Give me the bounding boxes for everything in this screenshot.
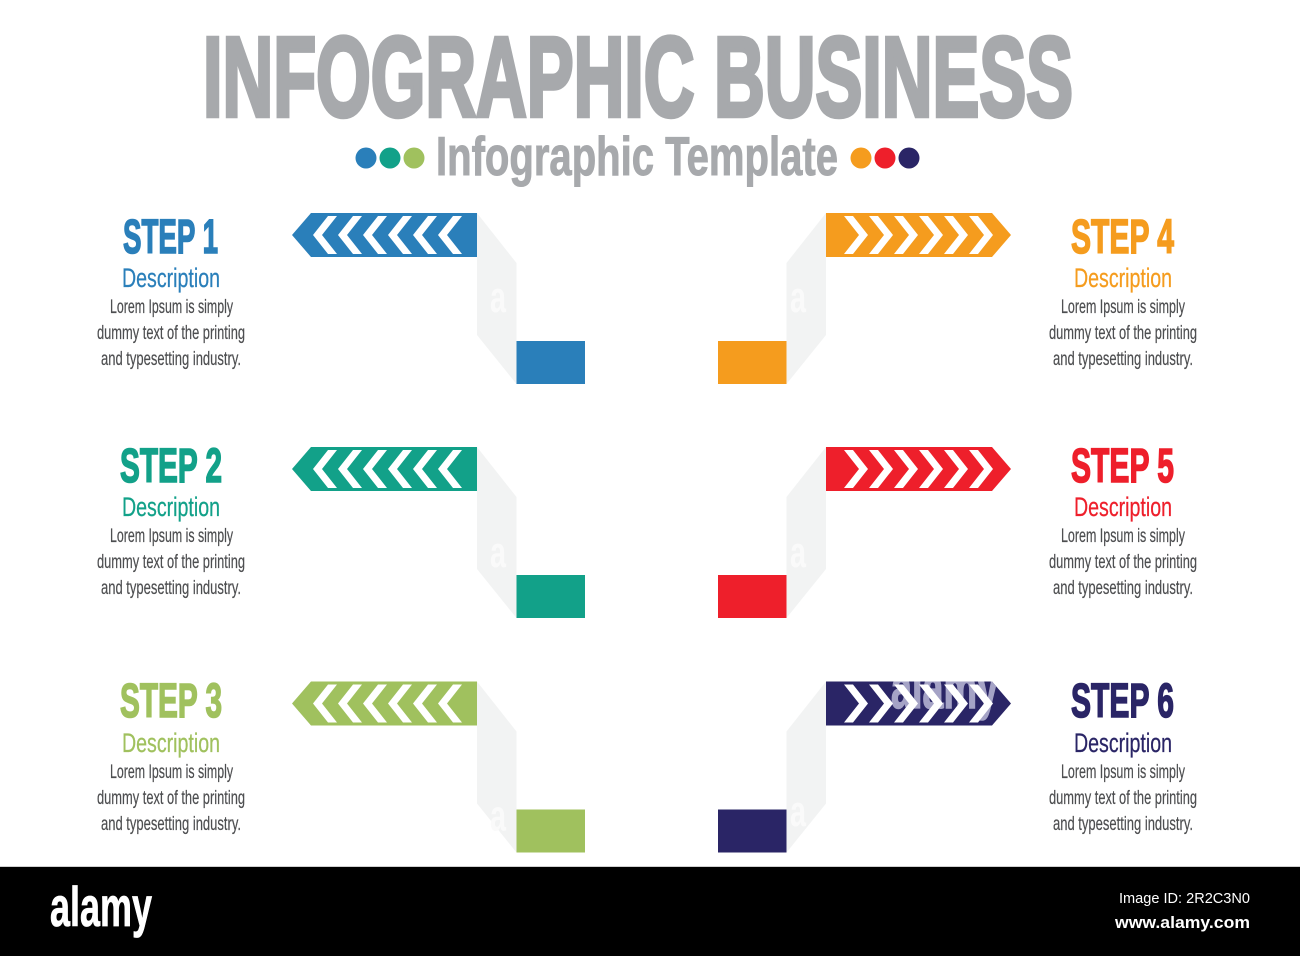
step 3 text block: Lorem Ipsum is simply [110, 761, 233, 783]
step 4 text block [1049, 211, 1197, 370]
step 5 connector graphic: a [790, 528, 806, 577]
step 2 text block: STEP 2 [120, 440, 222, 493]
step 5 text block: STEP 5 [1071, 440, 1174, 493]
step 5 text block: dummy text of the printing [1049, 551, 1197, 573]
step 5 text block: Lorem Ipsum is simply [1061, 525, 1185, 547]
right colour dots [850, 148, 920, 168]
step 6 text block: Lorem Ipsum is simply [1061, 761, 1185, 783]
footer bar: www.alamy.com [1114, 913, 1250, 932]
step 6 text block: Description [1074, 728, 1172, 758]
step 2 text block: Description [122, 492, 220, 522]
footer bar: alamy [50, 875, 152, 938]
step 2 connector graphic [292, 447, 585, 618]
step 4 text block: Lorem Ipsum is simply [1061, 296, 1185, 318]
step 3 text block: STEP 3 [120, 675, 222, 728]
step 4 text block: and typesetting industry. [1053, 348, 1193, 370]
step 4 connector graphic: a [790, 273, 806, 322]
step 3 connector graphic [292, 682, 585, 852]
step 2 text block: and typesetting industry. [101, 577, 241, 599]
step 4 text block: STEP 4 [1071, 211, 1174, 264]
step 1 text block: Lorem Ipsum is simply [110, 296, 233, 318]
step 5 text block: Description [1074, 492, 1172, 522]
step 1 text block: and typesetting industry. [101, 348, 241, 370]
step 2 text block: Lorem Ipsum is simply [110, 525, 233, 547]
step 4 text block: Description [1074, 263, 1172, 293]
step 3 connector graphic: a [490, 792, 506, 840]
step 5 text block [1049, 440, 1197, 599]
step 6 connector graphic: a [790, 787, 806, 836]
step 1 text block: STEP 1 [123, 211, 218, 264]
step 2 connector graphic: a [490, 528, 506, 577]
footer bar [0, 866, 1300, 956]
step 4 connector graphic [718, 213, 1011, 384]
step 4 text block: dummy text of the printing [1049, 322, 1197, 344]
step 3 text block: Description [122, 728, 220, 758]
step 3 text block: dummy text of the printing [97, 787, 245, 809]
step 1 connector graphic [292, 213, 585, 384]
footer bar: Image ID: 2R2C3N0 [1119, 890, 1250, 907]
subtitle: Infographic Template [436, 125, 838, 187]
step 5 text block: and typesetting industry. [1053, 577, 1193, 599]
step 6 text block: and typesetting industry. [1053, 813, 1193, 835]
step 6 text block: dummy text of the printing [1049, 787, 1197, 809]
step 2 text block: dummy text of the printing [97, 551, 245, 573]
step 6 connector graphic: alamy [891, 656, 998, 721]
step 1 connector graphic: a [490, 273, 506, 322]
step 1 text block [97, 211, 245, 370]
step 5 connector graphic [718, 447, 1011, 618]
step 6 text block: STEP 6 [1071, 675, 1174, 728]
step 6 connector graphic [718, 682, 1011, 852]
step 6 text block [1049, 675, 1197, 835]
left colour dots [356, 148, 424, 168]
step 3 text block [97, 675, 245, 835]
step 1 text block: dummy text of the printing [97, 322, 245, 344]
step 2 text block [97, 440, 245, 599]
step 3 text block: and typesetting industry. [101, 813, 241, 835]
step 1 text block: Description [122, 263, 220, 293]
